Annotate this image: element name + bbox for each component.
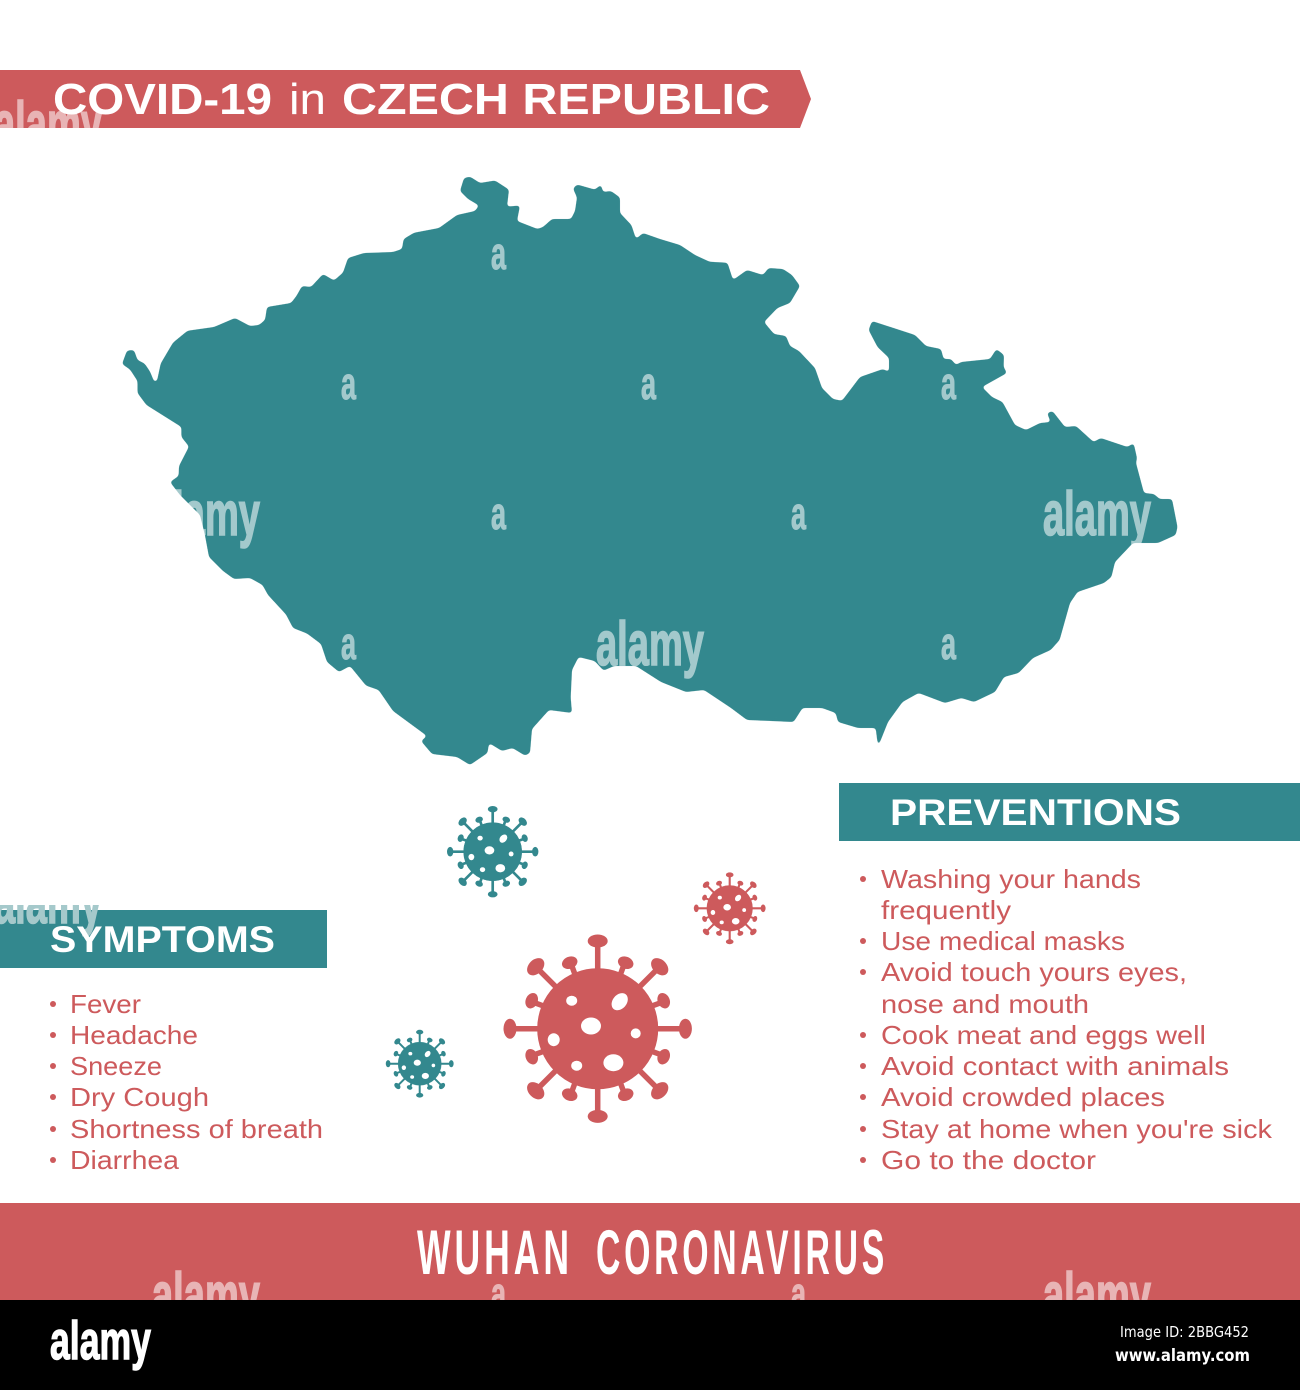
panel: symptoms list: Dry Cough (70, 1082, 209, 1112)
panel: preventions list: nose and mouth (881, 989, 1089, 1019)
watermarks: a (491, 228, 507, 279)
panel: symptoms heading: SYMPTOMS (50, 919, 275, 960)
watermarks: a (791, 488, 807, 539)
alamy logo: alamy (50, 1311, 151, 1371)
bottom credit bar (0, 1300, 1300, 1390)
watermarks: a (341, 618, 357, 669)
panel: preventions list: Avoid crowded places (881, 1082, 1165, 1112)
watermarks: a (641, 358, 657, 409)
panel: symptoms list: Fever (70, 989, 141, 1019)
panel: preventions list: Stay at home when you're sick (881, 1114, 1273, 1144)
panel: symptoms list: Headache (70, 1020, 198, 1050)
watermarks: a (941, 618, 957, 669)
watermarks (152, 228, 1151, 1330)
panel: preventions list: Cook meat and eggs well (881, 1020, 1206, 1050)
watermarks: a (341, 358, 357, 409)
panel: preventions heading: PREVENTIONS (890, 792, 1181, 833)
image id: Image ID: 2BBG452 (1120, 1323, 1249, 1341)
watermarks: a (791, 1268, 807, 1319)
watermarks: alamy (1043, 1261, 1151, 1330)
virus icon: red small (694, 872, 766, 944)
virus icon: red large (504, 934, 692, 1123)
watermarks: a (941, 358, 957, 409)
watermarks: alamy (1043, 480, 1151, 549)
panel: symptoms list: Shortness of breath (70, 1114, 323, 1144)
footer band: WUHAN (417, 1218, 573, 1288)
panel: preventions list: frequently (881, 895, 1011, 925)
title banner (0, 70, 811, 128)
footer band: CORONAVIRUS (596, 1218, 888, 1288)
watermarks: alamy (152, 1261, 260, 1330)
watermarks: alamy (596, 610, 704, 679)
watermarks: a (491, 1268, 507, 1319)
map: Czech Republic (122, 177, 1178, 765)
title text: in (289, 75, 326, 124)
footer band (0, 1203, 1300, 1300)
virus icon: teal small (386, 1030, 454, 1098)
panel: preventions list: Avoid contact with animals (881, 1051, 1229, 1081)
panel: preventions list (860, 864, 1273, 1175)
website: www.alamy.com (1115, 1346, 1250, 1366)
panel: preventions heading (839, 783, 1300, 841)
watermarks: alamy (152, 480, 260, 549)
panel: preventions list: Go to the doctor (881, 1145, 1096, 1175)
panel: symptoms list: Sneeze (70, 1051, 162, 1081)
virus icon: teal top (447, 806, 538, 897)
panel: preventions list: Avoid touch yours eyes, (881, 957, 1187, 987)
panel: preventions list: Washing your hands (881, 864, 1141, 894)
panel: symptoms heading (0, 905, 327, 968)
panel: symptoms list: Diarrhea (70, 1145, 180, 1175)
panel: preventions list: Use medical masks (881, 926, 1125, 956)
title text: COVID-19 (53, 75, 272, 124)
title text: CZECH REPUBLIC (342, 75, 770, 124)
panel: symptoms list (50, 989, 323, 1175)
watermarks: a (491, 488, 507, 539)
